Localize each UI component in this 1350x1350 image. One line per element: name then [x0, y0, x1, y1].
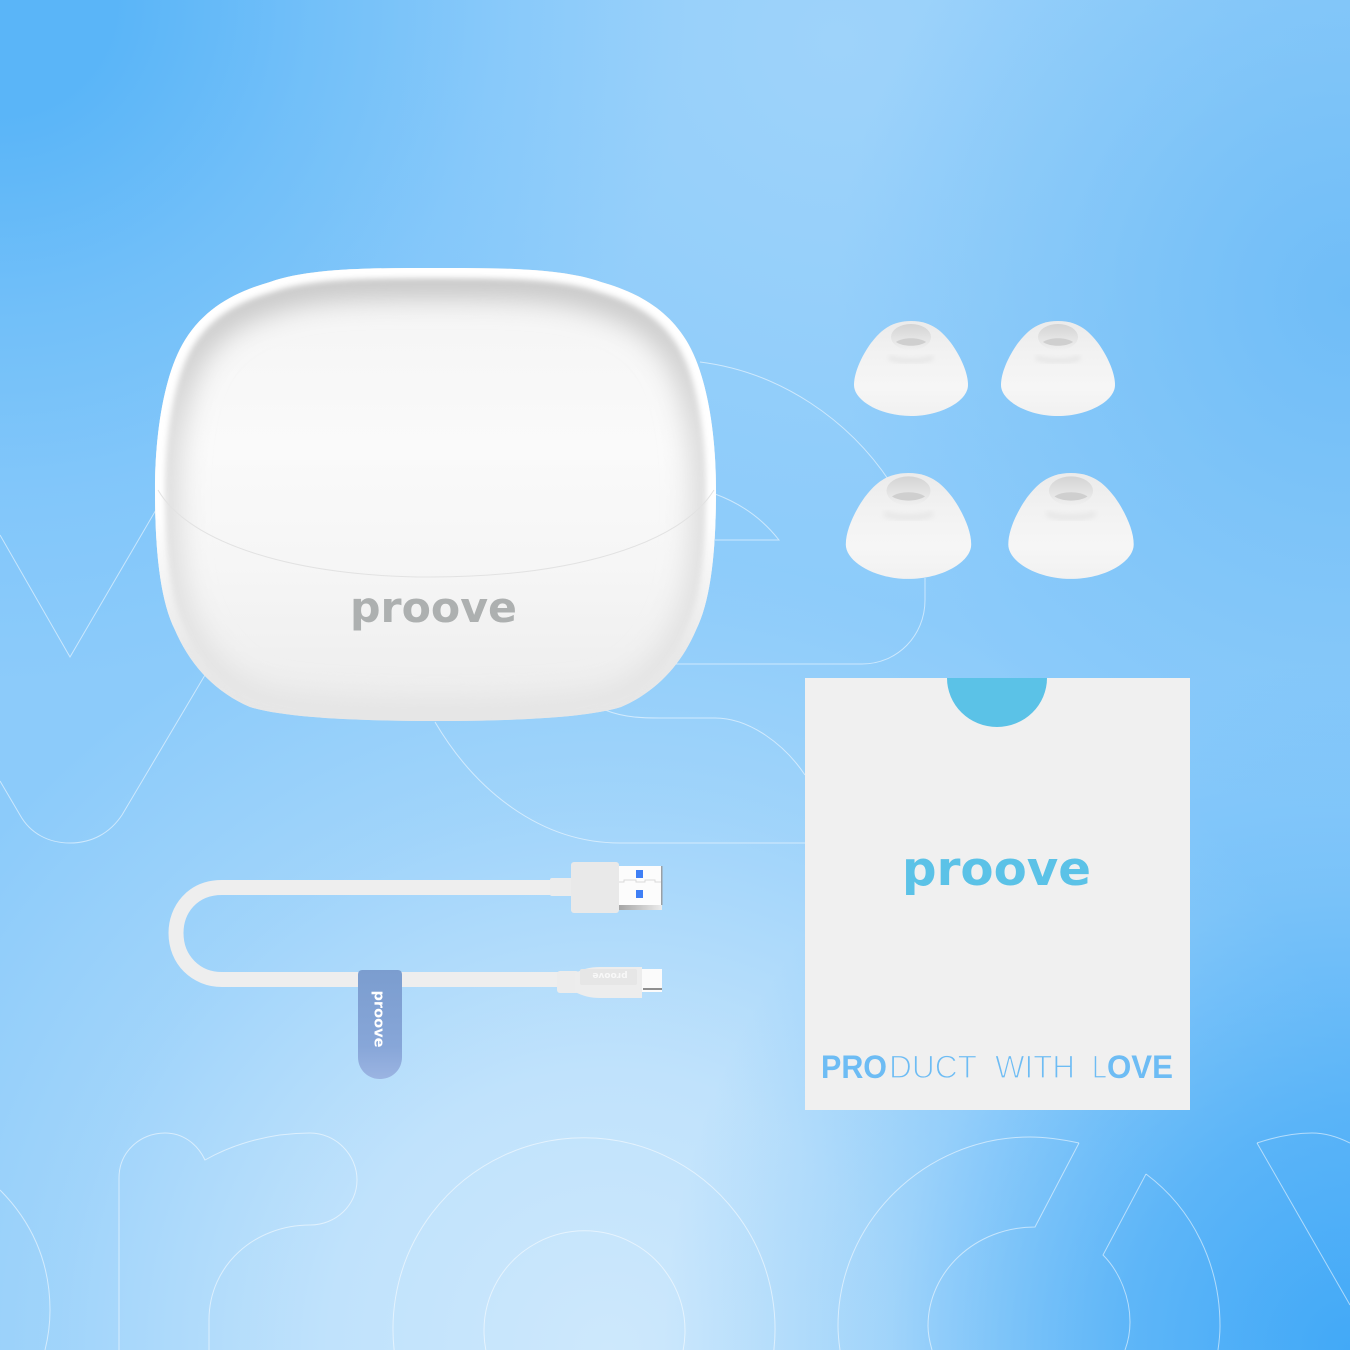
card tagline: DUCT — [889, 1049, 977, 1085]
card logo: proove — [902, 842, 1091, 897]
tag label: proove — [370, 990, 386, 1048]
USB-C connector — [557, 967, 662, 998]
card tagline: PRO — [821, 1049, 887, 1085]
USB-A connector — [550, 862, 662, 913]
ear tips — [846, 321, 1134, 579]
warranty card — [805, 678, 1190, 1110]
charging case — [155, 268, 716, 721]
card tagline: L — [1092, 1049, 1107, 1085]
card notch — [947, 678, 1047, 727]
ear tip bottom right — [1008, 473, 1134, 579]
ear tip top right — [1001, 321, 1115, 416]
background outline lettering — [0, 362, 1350, 1350]
ear tip bottom left — [846, 473, 971, 579]
case logo: proove — [350, 583, 517, 632]
ear tip top left — [854, 321, 968, 416]
charging cable — [176, 862, 662, 1079]
card tagline — [821, 1049, 1173, 1085]
card tagline: OVE — [1107, 1049, 1173, 1085]
USB-C connector label: proove — [592, 970, 628, 980]
cable cord — [176, 888, 562, 980]
card tagline: WITH — [995, 1049, 1075, 1085]
cable tie tag — [358, 970, 402, 1079]
